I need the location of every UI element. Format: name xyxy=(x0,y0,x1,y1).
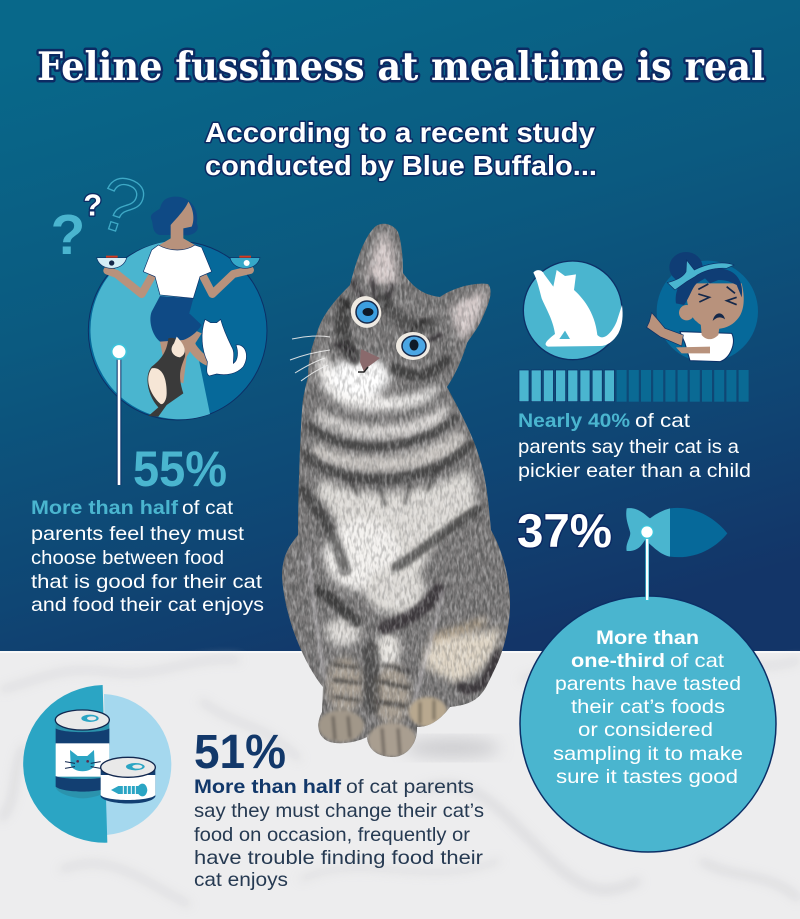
pointer dot and line xyxy=(641,526,653,600)
panel: cat photo illustration xyxy=(280,220,515,760)
cat fine highlights xyxy=(280,220,515,760)
panel: cat and child icons xyxy=(519,252,758,402)
callout text xyxy=(553,627,743,788)
callout text: sure it tastes good xyxy=(556,766,738,788)
subtitle xyxy=(205,117,597,181)
pointer dot and line xyxy=(112,344,126,485)
split circle xyxy=(23,685,171,843)
white cat xyxy=(202,319,246,376)
51% stat: 51% xyxy=(194,726,286,779)
icon: question marks: ? xyxy=(88,159,155,253)
text: more than half choose between foods: More than half xyxy=(31,497,179,519)
subtitle: conducted by Blue Buffalo... xyxy=(205,150,597,181)
text: more than half choose between foods: parents feel they must xyxy=(31,523,245,545)
icon: fish bone xyxy=(111,784,147,796)
icon: question marks: ? xyxy=(51,204,85,267)
text: more than half choose between foods: of cat xyxy=(182,497,234,519)
cat markings xyxy=(280,220,515,760)
text: more than half choose between foods: choose between food xyxy=(31,547,224,569)
icon: cat face xyxy=(70,750,95,771)
icon: fish 37% xyxy=(626,508,727,600)
text: more than half change food: cat enjoys xyxy=(194,869,288,891)
text: more than half change food: say they must change their cat’s xyxy=(194,800,484,822)
icon: white cat in circle xyxy=(523,261,623,360)
cat whiskers xyxy=(290,336,330,381)
callout text: or considered xyxy=(578,719,713,741)
callout text: their cat’s foods xyxy=(571,696,725,718)
cat dark fur layer xyxy=(280,220,515,760)
text: nearly 40% pickier than a child: pickier eater than a child xyxy=(518,460,751,482)
text: nearly 40% pickier than a child: parents say their cat is a xyxy=(518,436,739,458)
big circle callout xyxy=(520,596,776,852)
pie circle xyxy=(88,241,267,420)
cat stripes xyxy=(302,278,497,706)
icon: child refusing food xyxy=(647,252,758,362)
icon: question marks: ? xyxy=(83,188,102,222)
progress bars: 8 of 19 filled xyxy=(519,370,749,402)
37% stat: 37% xyxy=(517,504,612,557)
text: more than half choose between foods: that is good for their cat xyxy=(31,571,263,593)
title: Feline fussiness at mealtime is real xyxy=(37,44,765,90)
cat base silhouette xyxy=(282,224,510,757)
woman figure xyxy=(107,197,250,383)
callout text: parents have tasted xyxy=(555,673,741,695)
cat paws xyxy=(318,697,447,757)
callout text: sampling it to make xyxy=(553,743,743,765)
bowls xyxy=(97,256,260,268)
text: more than half change food: of cat parents xyxy=(346,776,474,798)
cat eyes and nose xyxy=(346,291,430,372)
cat light patches xyxy=(312,232,500,725)
short can xyxy=(101,757,155,804)
callout text: one-third xyxy=(571,650,665,672)
text: more than half change food: More than half xyxy=(194,776,342,798)
blue gradient background xyxy=(0,0,800,652)
tall can xyxy=(55,710,109,798)
text: more than half change food: food on occasion, frequently or xyxy=(194,824,471,846)
text: more than half choose between foods: and food their cat enjoys xyxy=(31,594,264,616)
text: more than half change food: have trouble finding food their xyxy=(194,847,484,869)
text: more than half change food xyxy=(194,776,484,891)
black and cream cat xyxy=(147,337,185,417)
panel: food cans icon xyxy=(23,685,171,843)
callout text: More than xyxy=(596,627,699,649)
subtitle: According to a recent study xyxy=(205,117,595,148)
icon: question marks xyxy=(51,159,155,267)
panel: 55% woman illustration xyxy=(51,159,267,485)
leg outlines xyxy=(308,553,443,707)
text: nearly 40% pickier than a child xyxy=(518,410,751,482)
marble tabletop xyxy=(0,651,800,919)
55% stat: 55% xyxy=(133,441,227,497)
text: nearly 40% pickier than a child: Nearly 40% xyxy=(518,410,630,432)
text: nearly 40% pickier than a child: of cat xyxy=(635,410,691,432)
callout text: of cat xyxy=(670,650,725,672)
text: more than half choose between foods xyxy=(31,497,264,616)
